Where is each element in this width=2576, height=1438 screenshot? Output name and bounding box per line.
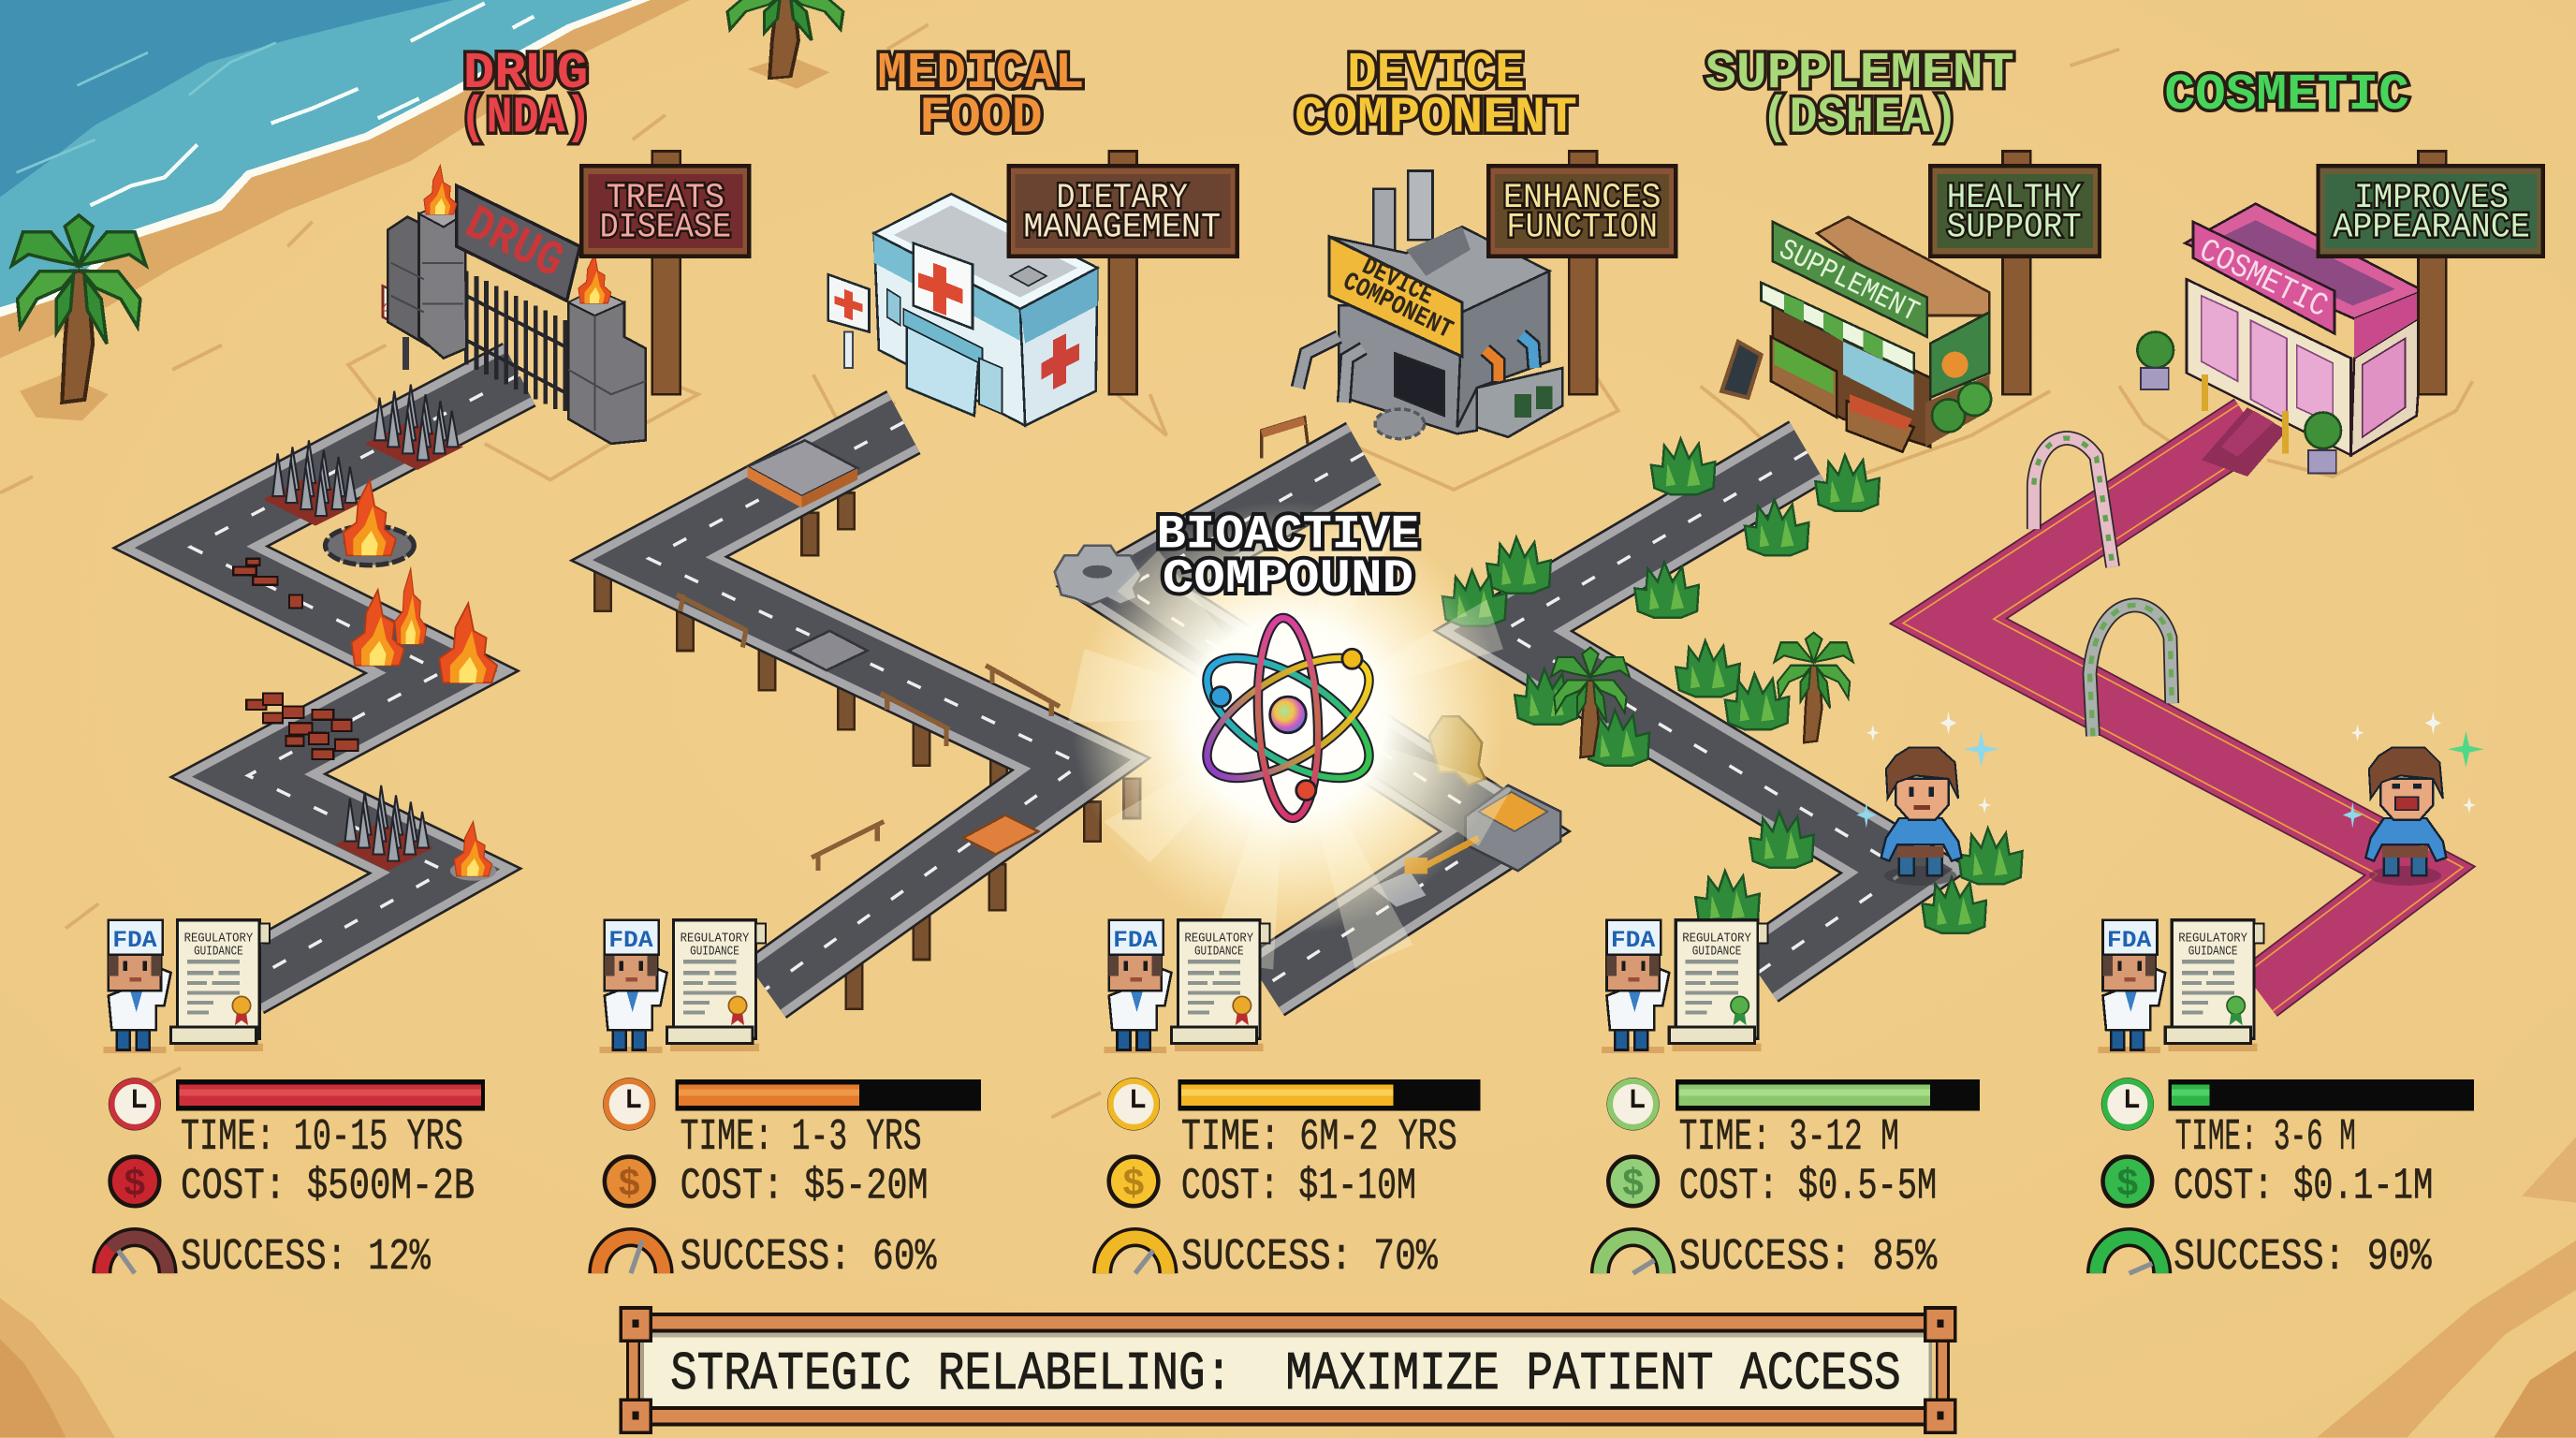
cost text: COST: $0.5-5M bbox=[1679, 1162, 1937, 1211]
building: factory bbox=[1298, 171, 1562, 439]
heading: device component: DEVICE bbox=[1347, 46, 1525, 103]
potted plants bbox=[2137, 332, 2174, 389]
stats panel: drug bbox=[102, 1078, 485, 1283]
fda officer and guidance: medical food: FDA bbox=[608, 929, 653, 954]
clock icon bbox=[1107, 1078, 1160, 1130]
character: happy person on carpet bbox=[2365, 748, 2446, 886]
building: factory: DEVICE bbox=[1357, 253, 1438, 312]
stats panel: supplement bbox=[1600, 1078, 1980, 1283]
chalkboard bbox=[1721, 342, 1761, 398]
stats panel: medical food bbox=[598, 1078, 981, 1283]
floral arch: upper bbox=[2034, 438, 2113, 566]
ocean and shoreline bbox=[0, 0, 690, 359]
success gauge bbox=[1600, 1238, 1666, 1273]
gold rope posts bbox=[2202, 374, 2208, 411]
signpost: dietary management bbox=[1009, 151, 1237, 394]
signpost: healthy support bbox=[1930, 151, 2100, 394]
speed bumps and railings bbox=[677, 440, 1060, 871]
heading: cosmetic: COSMETIC bbox=[2164, 67, 2409, 125]
heading: medical food: MEDICAL bbox=[877, 46, 1084, 103]
success text: SUCCESS: 85% bbox=[1679, 1233, 1938, 1283]
road obstacle: grey gear bbox=[1055, 546, 1142, 605]
signpost: healthy support: SUPPORT bbox=[1947, 209, 2082, 248]
signpost: healthy support: HEALTHY bbox=[1947, 179, 2082, 218]
sparkle: supplement bbox=[1856, 712, 1999, 829]
fda officer and guidance: medical food: GUIDANCE bbox=[690, 945, 739, 960]
cost coin bbox=[1608, 1157, 1658, 1207]
right pillars bbox=[568, 302, 646, 444]
time text: TIME: 3-6 M bbox=[2175, 1113, 2356, 1163]
light rays bbox=[1068, 526, 1512, 969]
fda officer and guidance: supplement bbox=[1602, 920, 1767, 1053]
building: factory: COMPONENT bbox=[1338, 268, 1457, 345]
success gauge bbox=[1103, 1238, 1168, 1273]
heading: medical food: FOOD bbox=[919, 90, 1043, 147]
success text: SUCCESS: 70% bbox=[1181, 1233, 1438, 1283]
signpost: improves appearance bbox=[2318, 151, 2543, 394]
floral arch: lower bbox=[2089, 605, 2172, 736]
label: bioactive compound: BIOACTIVE bbox=[1157, 508, 1419, 562]
cost coin: $ bbox=[618, 1164, 640, 1207]
clock icon bbox=[109, 1078, 161, 1130]
fda officer and guidance: supplement: REGULATORY bbox=[1682, 932, 1751, 946]
heading: drug nda: (NDA) bbox=[460, 90, 592, 147]
gate bars bbox=[460, 271, 568, 411]
fda officer and guidance: drug bbox=[104, 920, 270, 1053]
fda officer and guidance: device: REGULATORY bbox=[1184, 932, 1254, 946]
road: supplement path bbox=[1503, 452, 1906, 973]
signpost: improves appearance: APPEARANCE bbox=[2333, 209, 2530, 248]
success gauge bbox=[598, 1238, 664, 1273]
success text: SUCCESS: 90% bbox=[2174, 1233, 2432, 1283]
fda officer and guidance: cosmetic: REGULATORY bbox=[2178, 932, 2247, 946]
heading: supplement dshea: SUPPLEMENT bbox=[1705, 46, 2014, 103]
corner bolts bbox=[621, 1308, 1955, 1432]
cost coin: $ bbox=[1122, 1164, 1145, 1207]
roadside plants: supplement path bbox=[1442, 439, 2023, 933]
sparkle: cosmetic bbox=[2343, 712, 2484, 829]
left pillars bbox=[388, 217, 427, 345]
palm tree: beach left bbox=[12, 215, 146, 420]
cost coin: $ bbox=[124, 1164, 146, 1207]
fda officer and guidance: drug: GUIDANCE bbox=[194, 945, 243, 960]
time bar bbox=[1676, 1079, 1980, 1110]
banner: strategic relabeling bbox=[621, 1308, 1955, 1432]
heading: drug nda: DRUG bbox=[463, 46, 588, 103]
road: drug path bbox=[191, 374, 520, 983]
building: drug gate bbox=[380, 166, 646, 444]
signpost: dietary management: MANAGEMENT bbox=[1023, 209, 1221, 248]
banner text: STRATEGIC RELABELING: MAXIMIZE PATIENT ACCESS bbox=[670, 1344, 1901, 1405]
atom orbits bbox=[1188, 616, 1388, 820]
time text: TIME: 3-12 M bbox=[1679, 1113, 1899, 1163]
road obstacle: golden gear and machine bbox=[1372, 716, 1560, 907]
heading: supplement dshea: (DSHEA) bbox=[1761, 90, 1958, 147]
success gauge bbox=[102, 1238, 168, 1273]
gate banner bbox=[457, 185, 580, 301]
fda officer and guidance: supplement: FDA bbox=[1611, 929, 1656, 954]
cost text: COST: $0.1-1M bbox=[2174, 1162, 2433, 1211]
stats panel: device component bbox=[1103, 1078, 1480, 1283]
cost coin bbox=[110, 1157, 159, 1207]
fire pit bbox=[326, 479, 414, 565]
signpost: enhances function: ENHANCES bbox=[1503, 179, 1661, 218]
signpost: dietary management: DIETARY bbox=[1057, 179, 1188, 218]
success text: SUCCESS: 60% bbox=[681, 1233, 937, 1283]
cost text: COST: $500M-2B bbox=[181, 1162, 475, 1211]
label: bioactive compound: COMPOUND bbox=[1163, 553, 1413, 607]
fda officer and guidance: cosmetic: FDA bbox=[2107, 929, 2152, 954]
signpost: improves appearance: IMPROVES bbox=[2354, 179, 2509, 218]
time bar bbox=[176, 1079, 485, 1110]
building: drug gate: DRUG bbox=[456, 196, 572, 291]
fda officer and guidance: supplement: GUIDANCE bbox=[1692, 945, 1741, 960]
road: medical food pier bbox=[594, 422, 1140, 1009]
heading: device component: COMPONENT bbox=[1295, 90, 1577, 147]
road: device component path bbox=[1055, 418, 1560, 986]
building: supplement store bbox=[1721, 217, 1991, 452]
fda officer and guidance: device: GUIDANCE bbox=[1194, 945, 1244, 960]
road: red carpet cosmetic path bbox=[1949, 424, 2420, 992]
building: cosmetic store: COSMETIC bbox=[2193, 232, 2334, 326]
clock icon bbox=[1606, 1078, 1660, 1130]
signpost: treats disease: DISEASE bbox=[600, 209, 731, 248]
success gauge bbox=[2097, 1238, 2162, 1273]
signpost: enhances function bbox=[1488, 151, 1676, 394]
time text: TIME: 10-15 YRS bbox=[181, 1113, 463, 1163]
cost text: COST: $1-10M bbox=[1181, 1162, 1416, 1211]
time bar bbox=[675, 1079, 981, 1110]
clock icon bbox=[2101, 1078, 2154, 1130]
fda officer and guidance: medical food bbox=[600, 920, 766, 1053]
cost coin: $ bbox=[1621, 1164, 1645, 1207]
warning sign bbox=[380, 286, 432, 370]
cost coin bbox=[605, 1157, 654, 1207]
signpost: enhances function: FUNCTION bbox=[1506, 209, 1658, 248]
warning sign: DISEASE bbox=[380, 301, 429, 333]
time text: TIME: 1-3 YRS bbox=[681, 1113, 922, 1163]
pier posts bbox=[594, 493, 1140, 1009]
fda officer and guidance: drug: FDA bbox=[112, 929, 157, 954]
road obstacle: barrier bbox=[1262, 418, 1308, 459]
success text: SUCCESS: 12% bbox=[181, 1233, 431, 1283]
hospital roadside sign bbox=[828, 274, 869, 368]
building: supplement store: SUPPLEMENT bbox=[1774, 234, 1924, 330]
fda officer and guidance: cosmetic: GUIDANCE bbox=[2188, 945, 2237, 960]
fda officer and guidance: medical food: REGULATORY bbox=[681, 932, 750, 946]
carpet stairs bbox=[2202, 407, 2287, 477]
central atom: bioactive compound bbox=[1068, 501, 1512, 969]
building: hospital bbox=[828, 194, 1097, 426]
cost coin bbox=[1109, 1157, 1158, 1207]
fda officer and guidance: drug: REGULATORY bbox=[184, 932, 254, 946]
palm tree: top shore bbox=[723, 0, 848, 89]
clock icon bbox=[603, 1078, 655, 1130]
cost text: COST: $5-20M bbox=[681, 1162, 929, 1211]
nucleus and electrons bbox=[1211, 649, 1362, 800]
building: cosmetic store bbox=[2137, 204, 2423, 473]
fda officer and guidance: cosmetic bbox=[2098, 920, 2264, 1053]
rubble bbox=[233, 559, 359, 759]
signpost: treats disease: TREATS bbox=[607, 179, 724, 218]
time bar bbox=[1178, 1079, 1480, 1110]
cost coin bbox=[2103, 1157, 2152, 1207]
time bar bbox=[2169, 1079, 2474, 1110]
fda officer and guidance: device: FDA bbox=[1113, 929, 1158, 954]
character: happy person on supplement path bbox=[1881, 748, 1962, 886]
stats panel: cosmetic bbox=[2097, 1078, 2474, 1283]
drug path hazards bbox=[233, 385, 497, 881]
signpost: treats disease bbox=[581, 151, 749, 394]
fda officer and guidance: device bbox=[1104, 920, 1270, 1053]
time text: TIME: 6M-2 YRS bbox=[1181, 1113, 1457, 1163]
cost coin: $ bbox=[2116, 1164, 2139, 1207]
warning sign: TREATS bbox=[388, 291, 432, 320]
